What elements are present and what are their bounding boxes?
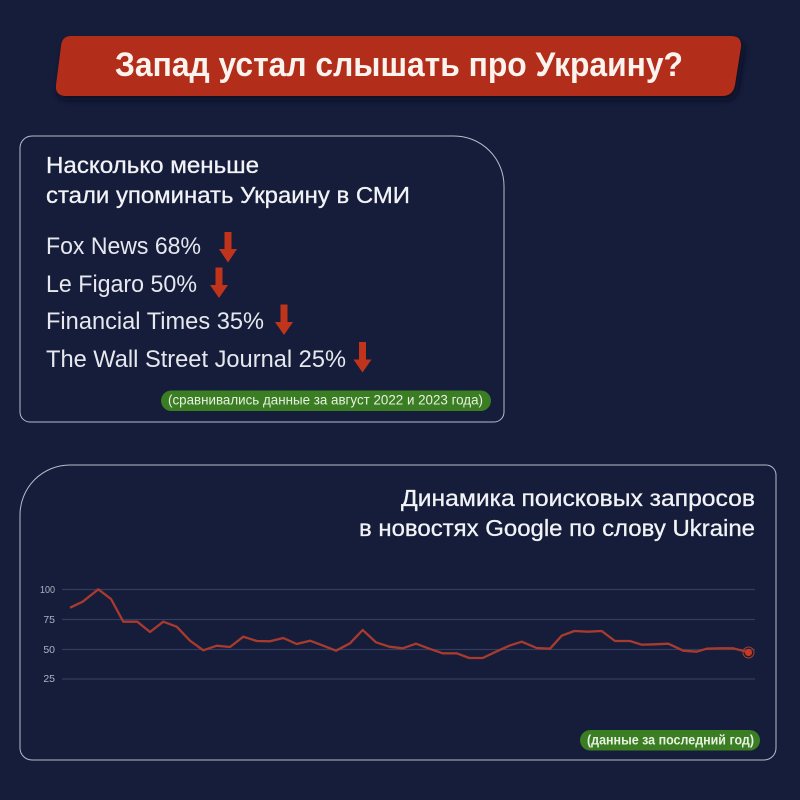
list: outlets: Financial Times 35% — [46, 308, 264, 335]
list: outlets: Le Figaro 50% — [46, 271, 197, 298]
heading: media mentions — [46, 152, 410, 208]
line chart: 25 — [43, 673, 55, 685]
heading: search dynamics — [359, 485, 755, 541]
icon: arrow Financial Times — [275, 304, 293, 335]
heading: search dynamics: Динамика поисковых запросов — [401, 485, 755, 511]
heading: search dynamics: в новостях Google по слову Ukraine — [359, 515, 755, 541]
line chart: 75 — [43, 614, 55, 626]
icon: arrow Fox News — [219, 232, 237, 262]
list: outlets — [46, 233, 346, 373]
title banner: Запад устал слышать про Украину? — [115, 46, 683, 84]
note pill: period: (данные за последний год) — [587, 732, 754, 748]
list: outlets: Fox News 68% — [46, 233, 201, 260]
list: outlets: The Wall Street Journal 25% — [46, 346, 346, 373]
title banner — [56, 36, 744, 100]
icon: arrow WSJ — [354, 342, 372, 372]
heading: media mentions: Насколько меньше — [46, 152, 259, 178]
heading: media mentions: стали упоминать Украину в СМИ — [46, 182, 410, 208]
note pill: comparison: (сравнивались данные за август 2022 и 2023 года) — [168, 392, 483, 408]
icon: arrow Le Figaro — [210, 268, 228, 298]
line chart: 100 — [40, 584, 55, 596]
note pill: period — [580, 730, 760, 750]
panel: search dynamics — [20, 465, 776, 760]
panel: media mentions — [20, 136, 504, 422]
line chart — [40, 584, 755, 685]
line chart: 50 — [43, 644, 55, 656]
